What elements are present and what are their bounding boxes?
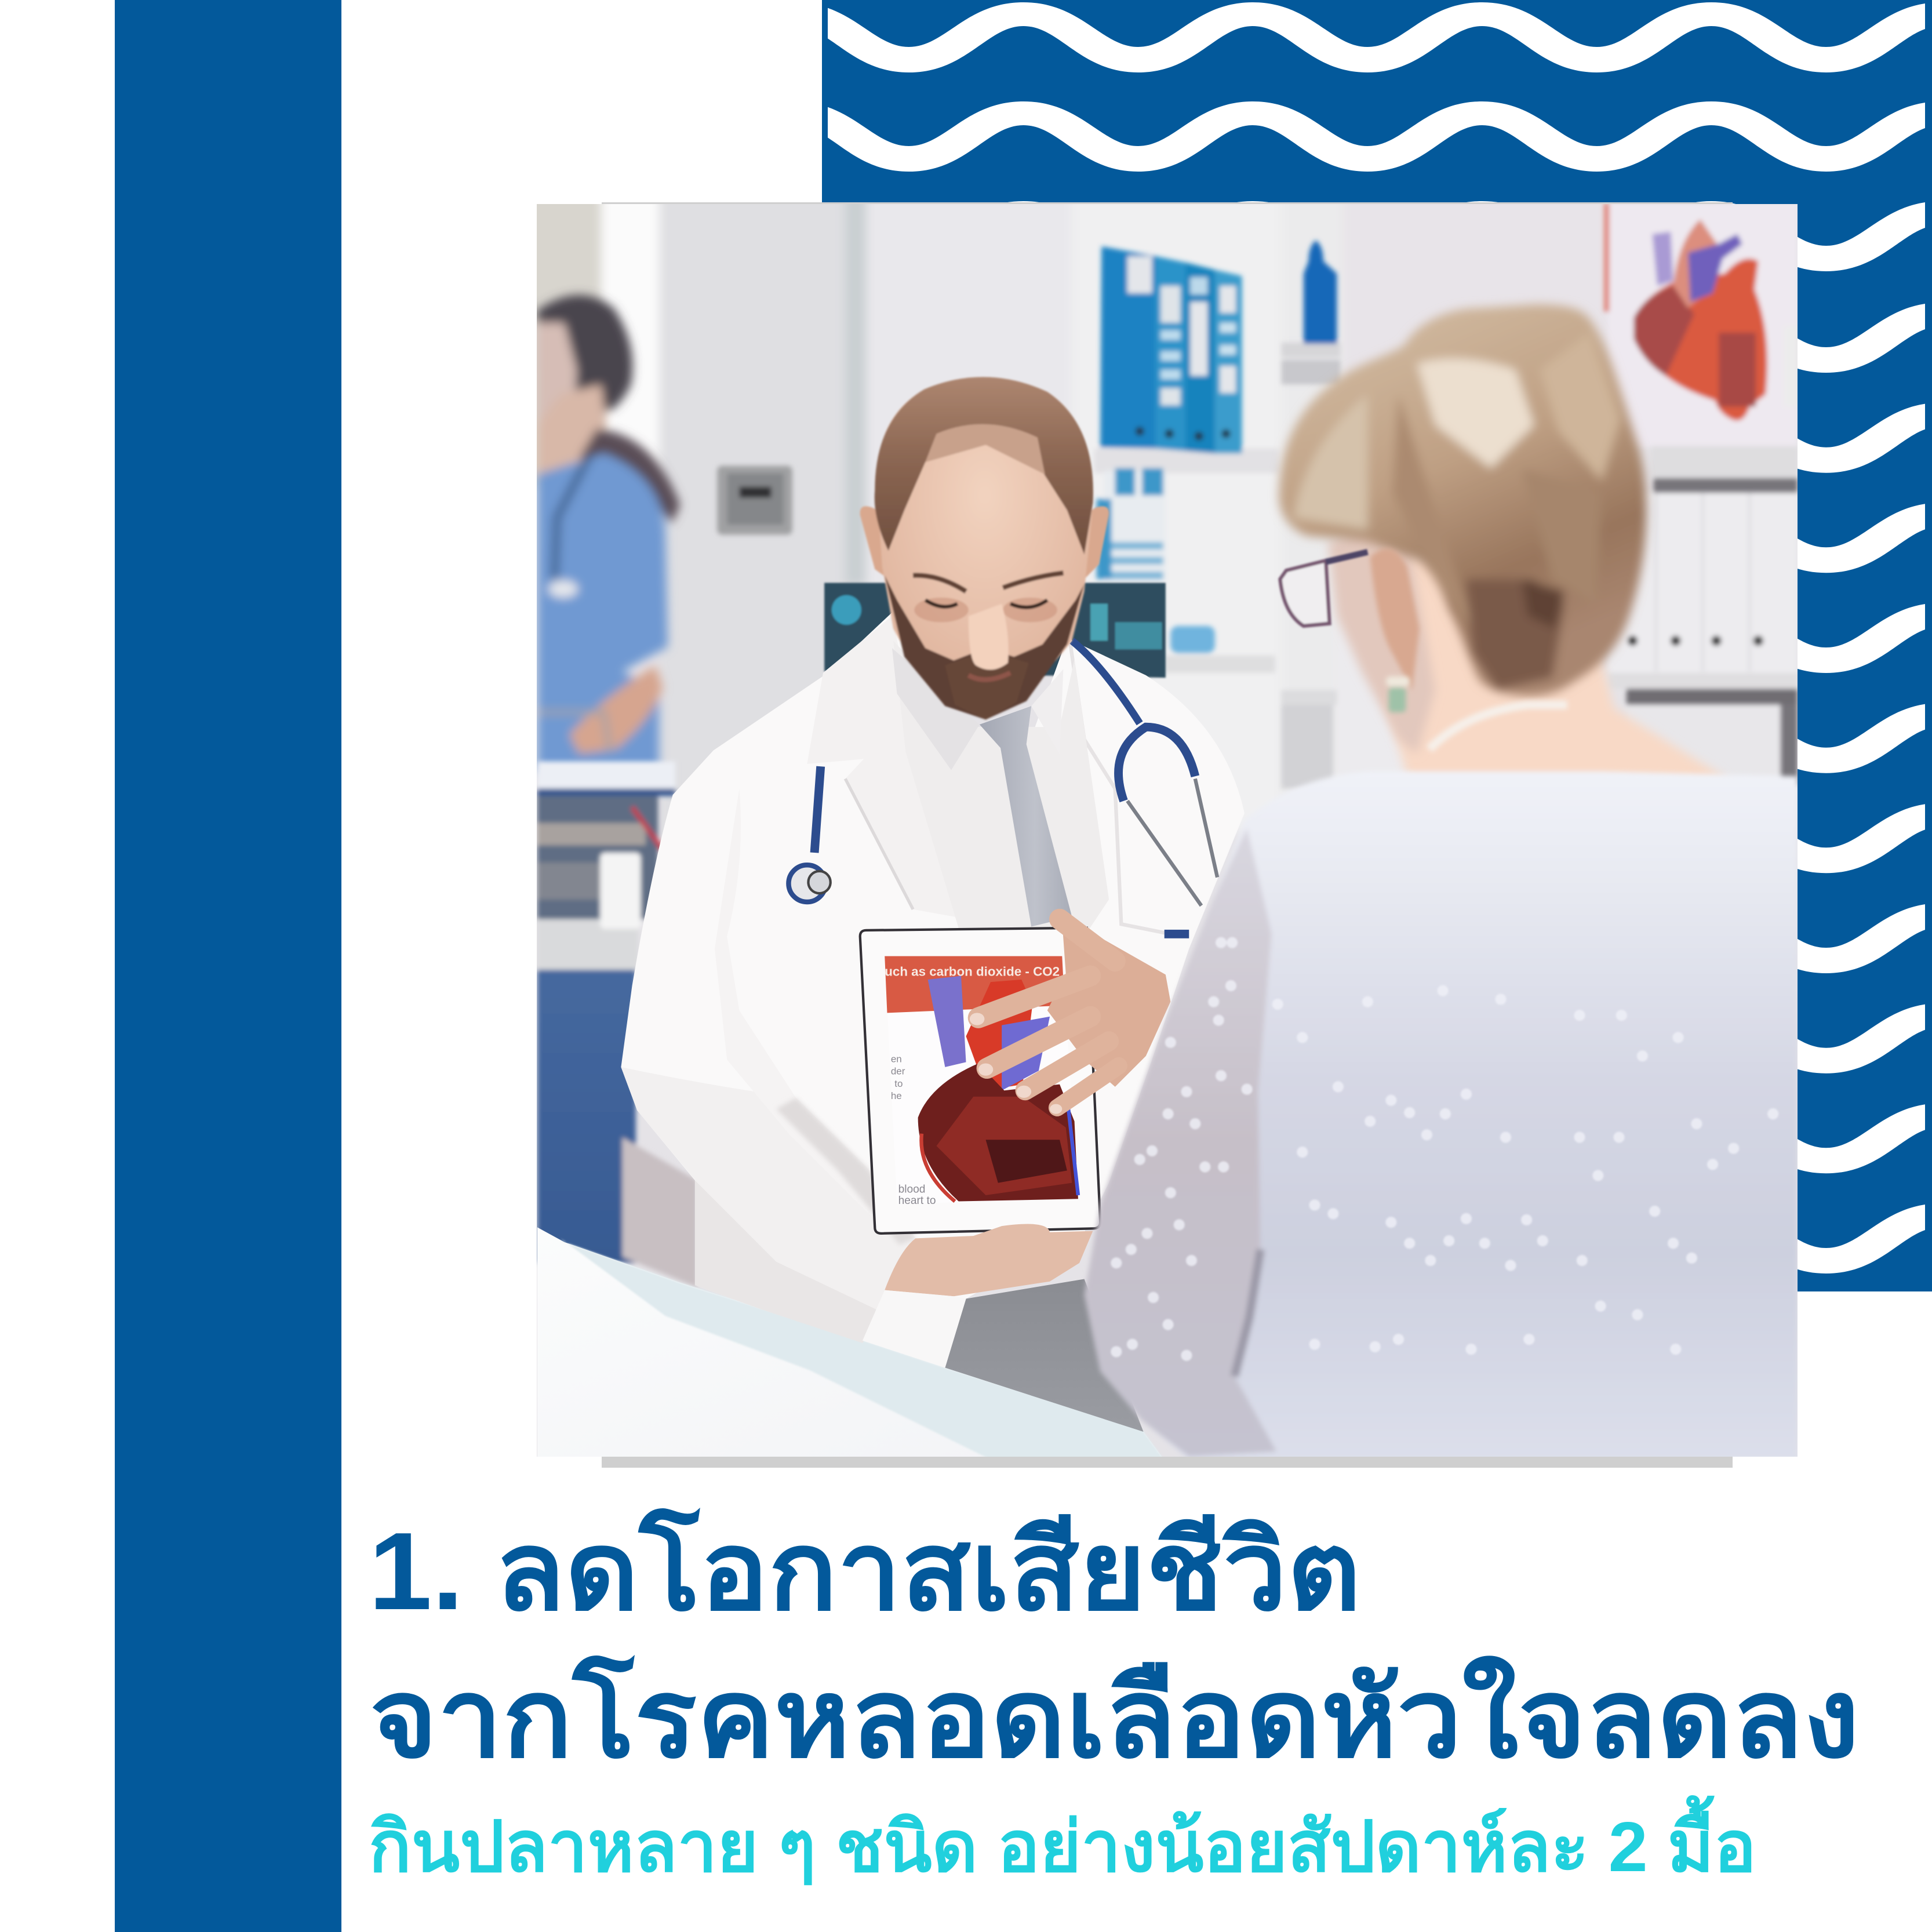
hair [1279,304,1646,696]
tablet screen: der [891,1066,905,1077]
tablet screen: he [891,1090,902,1101]
sheer sleeve [1085,828,1276,1457]
shelves with blue binders [1094,240,1341,788]
photo: doctor showing a tablet heart image to a patient [537,204,1798,1457]
patient [1085,304,1798,1460]
tablet screen: en [891,1053,902,1064]
doctor's lower hand [885,1224,1093,1296]
background right: poster and white binders [1604,203,1798,785]
brows and eyes [913,573,1063,591]
beard [885,576,1085,719]
bed [537,1227,1165,1460]
nurse in background [537,295,680,770]
white coat [621,612,1245,1368]
monitor [824,583,1166,678]
tablet screen [885,956,1078,1207]
left blue bar [115,0,341,1932]
cuff [863,1290,966,1368]
tie [980,706,1072,927]
desk items and cabinet [537,762,697,1287]
face [1328,518,1435,754]
glasses [1280,552,1367,626]
screen text: uch as carbon dioxide - CO2 [885,965,1060,979]
title: line 2: จากโรคหลอดเลือดหัวใจลดลง [370,1654,1860,1780]
earring [1386,676,1410,712]
wave pattern panel [822,0,1932,1291]
ear [1370,548,1420,690]
doctor [621,377,1245,1368]
necklace [1429,705,1567,749]
photo backing shadow [602,202,1733,1468]
head [860,377,1109,719]
subtitle: กินปลาหลาย ๆ ชนิด อย่างน้อยสัปดาห์ละ 2 มื้อ [369,1795,1756,1886]
tablet screen: blood [898,1184,925,1196]
doctor's upper hand [970,919,1170,1114]
shirt and collar [892,641,1109,937]
title: line 1: 1. ลดโอกาสเสียชีวิต [369,1507,1361,1633]
trousers [945,1279,1144,1432]
tablet screen: to [894,1078,903,1089]
sweater dots [1111,937,1778,1361]
hair [875,377,1093,555]
wall switch [717,466,792,535]
sweater [1085,772,1798,1460]
neck and shoulders [1349,542,1749,801]
tablet screen: heart to [898,1195,936,1207]
room background [523,191,1799,1458]
stethoscope [788,641,1217,934]
under-eye shading [914,598,969,622]
tablet showing heart [860,928,1100,1234]
